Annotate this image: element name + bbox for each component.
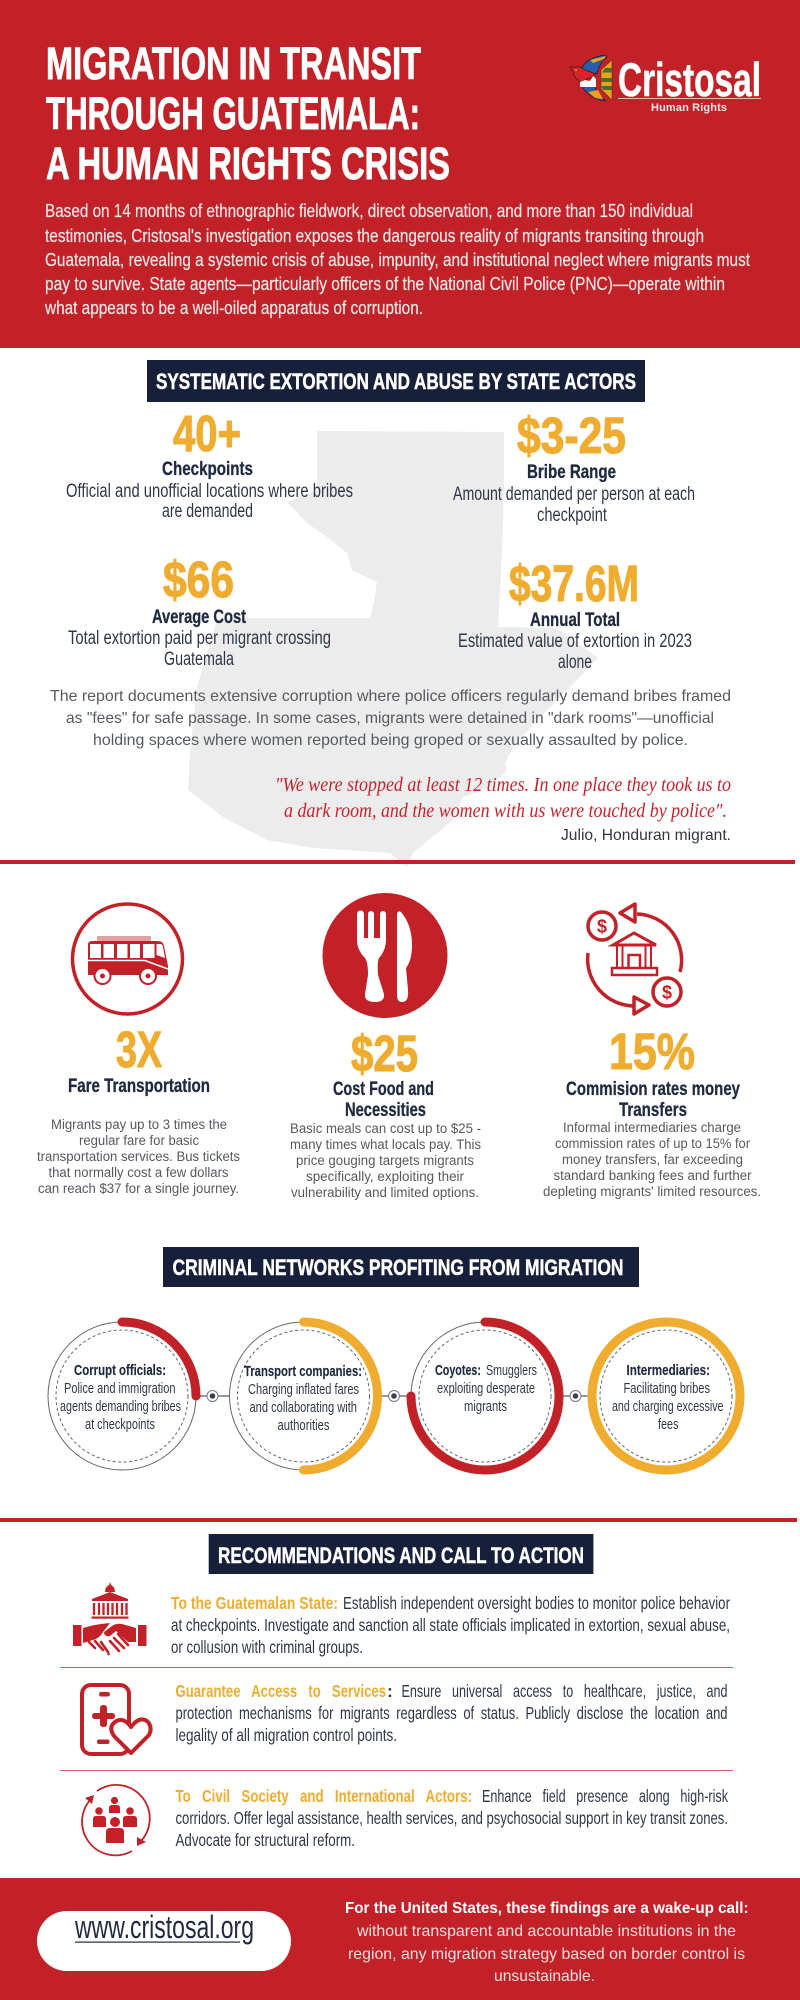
node: intermediaries: and charging excessive xyxy=(612,1399,724,1415)
intro text xyxy=(44,200,751,318)
node: transport companies xyxy=(230,1322,378,1470)
column: money transfers: standard banking fees and further xyxy=(554,1168,752,1183)
column: food: price gouging targets migrants xyxy=(296,1153,474,1168)
stat: annual total: Annual Total xyxy=(530,610,620,631)
column: money transfers: depleting migrants' limited resources. xyxy=(543,1184,761,1199)
call to action text xyxy=(345,1900,748,1985)
recommendation: access to services xyxy=(82,1681,728,1754)
column: fare transportation: regular fare for basic xyxy=(79,1133,199,1148)
node: transport companies: and collaborating with xyxy=(250,1400,357,1416)
node: transport companies: authorities xyxy=(278,1418,330,1434)
column: money transfers: money transfers, far exceeding xyxy=(562,1152,743,1167)
stat: annual total: alone xyxy=(558,652,592,673)
column: money transfers: commission rates of up to 15% for xyxy=(555,1136,750,1151)
recommendation: civil society: Advocate for structural reform. xyxy=(176,1830,355,1850)
icon: capitol and handshake xyxy=(73,1582,146,1655)
column: food: many times what locals pay. This xyxy=(290,1137,481,1152)
recommendation: Guatemalan State: To the Guatemalan State: xyxy=(171,1593,338,1613)
testimony quote: a dark room, and the women with us were touched by police". xyxy=(284,800,727,822)
column: food xyxy=(290,893,481,1200)
stat: annual total xyxy=(458,555,692,673)
panel: recommendations xyxy=(60,1534,733,1855)
stat: checkpoints: Checkpoints xyxy=(162,459,253,480)
call to action text: without transparent and accountable institutions in the xyxy=(356,1923,736,1940)
stat: average cost: $66 xyxy=(163,551,234,608)
column: food: specifically, exploiting their xyxy=(306,1169,464,1184)
stat: average cost xyxy=(68,551,331,670)
node: intermediaries: Intermediaries: xyxy=(626,1363,710,1379)
testimony quote: "We were stopped at least 12 times. In one place they took us to xyxy=(275,774,731,796)
node: coyotes: exploiting desperate xyxy=(437,1381,535,1397)
node: corrupt officials: agents demanding bribes xyxy=(60,1399,181,1415)
icon: people in cycle xyxy=(82,1785,150,1855)
node: coyotes: Coyotes: xyxy=(435,1363,481,1379)
recommendation: civil society xyxy=(82,1785,728,1855)
stat: checkpoints: are demanded xyxy=(162,501,253,522)
icon: phone and heart xyxy=(82,1685,151,1754)
node: intermediaries: Facilitating bribes xyxy=(624,1381,710,1397)
recommendation: Guatemalan State xyxy=(73,1582,730,1657)
column: money transfers: Commision rates money xyxy=(566,1079,740,1100)
column: food: $25 xyxy=(351,1025,418,1082)
column: money transfers: Transfers xyxy=(619,1100,687,1121)
website button: www.cristosal.org xyxy=(74,1909,254,1945)
report text: holding spaces where women reported being groped or sexually assaulted by police. xyxy=(93,732,688,749)
logo: Cristosal xyxy=(570,53,761,114)
section heading: CRIMINAL NETWORKS PROFITING FROM MIGRATION xyxy=(172,1255,624,1280)
stat: average cost: Total extortion paid per migrant crossing xyxy=(68,628,331,649)
node: coyotes xyxy=(411,1322,559,1470)
column: fare transportation: transportation services. Bus tickets xyxy=(37,1149,240,1164)
node: intermediaries xyxy=(592,1322,740,1470)
stat: average cost: Guatemala xyxy=(164,649,234,670)
column: money transfers xyxy=(543,904,761,1199)
recommendation: civil society: To Civil Society and International Actors: xyxy=(176,1786,472,1806)
column: fare transportation: Fare Transportation xyxy=(68,1076,210,1097)
stat: bribe range: Bribe Range xyxy=(527,462,616,483)
icon: bank and coins: $ xyxy=(597,916,607,936)
section heading xyxy=(209,1534,593,1574)
stat: bribe range: $3-25 xyxy=(517,407,626,464)
panel: footer xyxy=(0,1878,800,2000)
panel: header xyxy=(0,0,800,348)
column: food: Basic meals can cost up to $25 - xyxy=(290,1121,481,1136)
section heading: SYSTEMATIC EXTORTION AND ABUSE BY STATE ACTORS xyxy=(156,369,636,394)
website button xyxy=(37,1909,291,1971)
recommendation: Guatemalan State: or collusion with criminal groups. xyxy=(171,1637,363,1657)
column: money transfers: Informal intermediaries charge xyxy=(563,1120,741,1135)
logo: Cristosal: Human Rights xyxy=(651,102,727,114)
node: corrupt officials xyxy=(48,1322,196,1470)
section heading xyxy=(163,1247,639,1287)
node: coyotes: Smugglers xyxy=(486,1363,537,1379)
icon: fork and knife xyxy=(322,893,448,1018)
node: corrupt officials: Police and immigration xyxy=(64,1381,176,1397)
report text: The report documents extensive corruption where police officers regularly demand bribes framed xyxy=(50,688,731,705)
section heading: RECOMMENDATIONS AND CALL TO ACTION xyxy=(218,1543,584,1568)
icon: bird logo xyxy=(570,55,612,101)
testimony quote xyxy=(275,774,731,844)
icon: bank and coins: $ xyxy=(662,982,672,1002)
stat: checkpoints: Official and unofficial locations where bribes xyxy=(66,481,353,502)
column: food: Necessities xyxy=(345,1100,426,1121)
call to action text: unsustainable. xyxy=(494,1968,595,1985)
panel: criminal networks xyxy=(48,1247,740,1470)
node: coyotes: migrants xyxy=(464,1399,507,1415)
stat: annual total: $37.6M xyxy=(509,555,639,612)
recommendation: access to services: legality of all migration control points. xyxy=(176,1725,397,1745)
intro text: what appears to be a well-oiled apparatus of corruption. xyxy=(44,297,423,318)
node: corrupt officials: Corrupt officials: xyxy=(74,1363,166,1379)
node: intermediaries: fees xyxy=(658,1417,678,1433)
call to action text: region, any migration strategy based on border control is xyxy=(348,1946,745,1963)
title: A HUMAN RIGHTS CRISIS xyxy=(46,138,450,189)
stat: checkpoints: 40+ xyxy=(173,405,241,462)
title: THROUGH GUATEMALA: xyxy=(46,88,420,139)
stat: bribe range xyxy=(453,407,695,526)
column: fare transportation: that normally cost a few dollars xyxy=(48,1165,229,1180)
panel: costs xyxy=(37,893,761,1200)
stat: annual total: Estimated value of extortion in 2023 xyxy=(458,631,692,652)
icon: bank and coins xyxy=(588,904,682,1014)
column: fare transportation: can reach $37 for a single journey. xyxy=(38,1181,239,1196)
column: fare transportation: Migrants pay up to 3 times the xyxy=(51,1117,227,1132)
title: MIGRATION IN TRANSIT xyxy=(46,38,421,89)
column: food: Cost Food and xyxy=(333,1079,434,1100)
node: corrupt officials: at checkpoints xyxy=(85,1417,155,1433)
testimony quote: Julio, Honduran migrant. xyxy=(561,827,731,844)
map of Guatemala xyxy=(188,431,598,867)
recommendation: access to services: : xyxy=(387,1681,393,1701)
column: food: vulnerability and limited options. xyxy=(291,1185,479,1200)
report text: as "fees" for safe passage. In some cases, migrants were detained in "dark rooms"—unofficial xyxy=(66,710,714,727)
panel: systematic extortion xyxy=(50,360,731,867)
node: transport companies: Transport companies: xyxy=(244,1364,362,1380)
title xyxy=(46,38,450,189)
recommendation: access to services: Guarantee Access to Services xyxy=(176,1681,386,1701)
column: fare transportation: 3X xyxy=(116,1021,162,1078)
stat: checkpoints xyxy=(66,405,353,522)
stat: bribe range: Amount demanded per person at each xyxy=(453,484,695,505)
stat: bribe range: checkpoint xyxy=(537,505,608,526)
call to action text: For the United States, these findings are a wake-up call: xyxy=(345,1900,748,1917)
section heading xyxy=(147,360,645,402)
connectors xyxy=(196,1390,592,1402)
column: money transfers: 15% xyxy=(609,1023,695,1080)
icon: bus xyxy=(72,904,182,1014)
report text xyxy=(50,688,731,749)
column: fare transportation xyxy=(37,904,240,1196)
stat: average cost: Average Cost xyxy=(152,607,247,628)
node: transport companies: Charging inflated fares xyxy=(248,1382,359,1398)
